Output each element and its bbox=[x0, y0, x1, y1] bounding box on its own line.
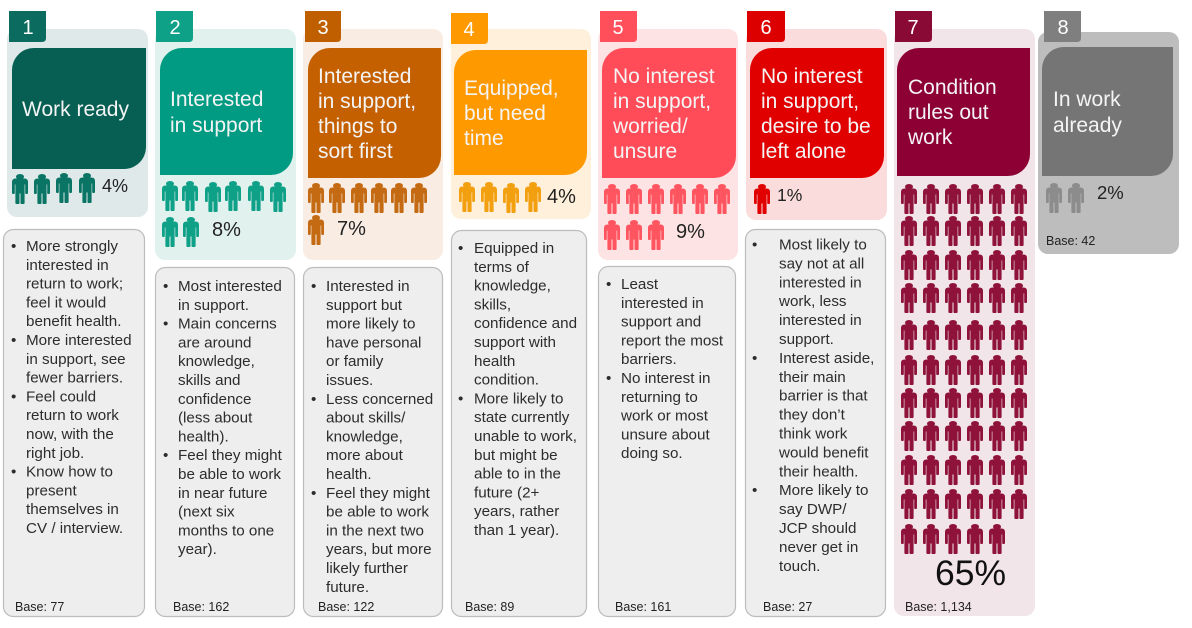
number tab 6: 6 bbox=[760, 17, 772, 39]
heading: no interest in support, worried/unsure: No interest bbox=[613, 65, 715, 88]
number tab 3: 3 bbox=[317, 17, 329, 39]
text block: segment 6: work, less bbox=[778, 293, 847, 310]
base 89: Base: 89 bbox=[465, 600, 514, 614]
heading: interested in support: in support bbox=[170, 114, 262, 137]
panel 1: work ready bbox=[7, 11, 148, 217]
text block: segment 3: • bbox=[311, 391, 316, 408]
text block: segment 1: CV / interview. bbox=[26, 520, 123, 537]
text block: segment 3: health. bbox=[326, 466, 372, 483]
text block: segment 4: able to in the bbox=[474, 466, 561, 483]
text block: segment 1: fewer barriers. bbox=[26, 370, 123, 387]
heading: no interest in support, worried/unsure: worried/ bbox=[612, 115, 688, 138]
text block: segment 4: More likely to bbox=[474, 390, 563, 407]
heading: interested in support, things to sort first: in support, bbox=[318, 90, 416, 113]
text block: segment 5: barriers. bbox=[621, 351, 677, 368]
text block: segment 4: future (2+ bbox=[474, 484, 540, 501]
text block: segment 2: skills and bbox=[178, 372, 240, 389]
text block: segment 6: touch. bbox=[779, 558, 820, 575]
number tab 4 bbox=[451, 13, 488, 44]
text block: segment 5: unsure about bbox=[621, 426, 710, 443]
text block: segment 4: state currently bbox=[474, 409, 570, 426]
text block: segment 3: • bbox=[311, 485, 316, 502]
text block: segment 4: unable to work, bbox=[474, 428, 577, 445]
text block: segment 3: years, but more bbox=[326, 541, 432, 558]
heading: no interest in support, desire to be left alone: left alone bbox=[761, 140, 846, 163]
text block: segment 2: are around bbox=[178, 334, 251, 351]
heading: no interest in support, desire to be left alone: No interest bbox=[761, 65, 863, 88]
heading: interested in support, things to sort first: sort first bbox=[318, 140, 393, 163]
text block: segment 1: interested in bbox=[26, 257, 109, 274]
heading: work ready: Work ready bbox=[22, 98, 129, 121]
heading: condition rules out work: work bbox=[907, 126, 953, 149]
percentage 8%: 8% bbox=[212, 219, 241, 241]
text block: segment 2: in near future bbox=[178, 485, 268, 502]
heading: interested in support, things to sort first bbox=[308, 48, 441, 178]
text block: segment 6: JCP should bbox=[779, 520, 856, 537]
panel 6: no interest in support, desire to be left alone bbox=[746, 11, 887, 220]
text block: segment 5: returning to bbox=[621, 389, 698, 406]
icons: 2 people bbox=[1046, 183, 1084, 213]
text block: segment 2: knowledge, bbox=[178, 353, 255, 370]
icons: 4 people bbox=[12, 173, 95, 204]
panel 5: no interest in support, worried/unsure bbox=[598, 11, 738, 260]
text block: segment 2: health). bbox=[178, 428, 229, 445]
icons: 4 people bbox=[459, 182, 541, 213]
number tab 6 bbox=[747, 11, 785, 42]
text block: segment 1: return to work bbox=[26, 407, 119, 424]
text block: segment 6 bbox=[746, 230, 886, 616]
icons: 1 person bbox=[754, 184, 770, 214]
heading: no interest in support, worried/unsure bbox=[602, 48, 736, 178]
text block: segment 5: • bbox=[606, 370, 611, 387]
heading: in work already: already bbox=[1053, 114, 1122, 137]
text block: segment 6: their health. bbox=[779, 463, 858, 480]
text block: segment 6: Interest aside, bbox=[779, 350, 874, 367]
text block: segment 4: than 1 year). bbox=[474, 522, 559, 539]
text block: segment 3: more about bbox=[326, 447, 404, 464]
heading: equipped, but need time: but need bbox=[464, 102, 546, 125]
text block: segment 5: Least bbox=[621, 276, 659, 293]
text block: segment 6: never get in bbox=[779, 539, 858, 556]
number tab 5: 5 bbox=[612, 17, 624, 39]
text block: segment 3: future. bbox=[326, 579, 369, 596]
heading: no interest in support, worried/unsure: unsure bbox=[613, 140, 677, 163]
text block: segment 2: Most interested bbox=[178, 278, 282, 295]
text block: segment 6: say not at all bbox=[779, 255, 864, 272]
number tab 2: 2 bbox=[169, 17, 181, 39]
heading: equipped, but need time: Equipped, bbox=[464, 77, 559, 100]
heading: no interest in support, worried/unsure: in support, bbox=[613, 90, 711, 113]
text block: segment 3: be able to work bbox=[326, 504, 429, 521]
number tab 1 bbox=[9, 11, 46, 42]
text block: segment 4: skills, bbox=[474, 296, 511, 313]
heading: condition rules out work: rules out bbox=[908, 101, 989, 124]
text block: segment 6: • bbox=[752, 482, 757, 499]
number tab 2 bbox=[156, 11, 193, 42]
text block: segment 2: Main concerns bbox=[178, 316, 277, 333]
text block: segment 2: be able to work bbox=[178, 466, 281, 483]
percentage 65%: 65% bbox=[935, 553, 1006, 593]
text block: segment 6: think work bbox=[779, 426, 848, 442]
heading: interested in support bbox=[160, 48, 293, 175]
base 77: Base: 77 bbox=[15, 600, 64, 614]
text block: segment 4: • bbox=[458, 240, 463, 257]
text block: segment 2: confidence bbox=[178, 391, 251, 408]
text block: segment 5: • bbox=[606, 276, 611, 293]
text block: segment 3: more likely to bbox=[326, 316, 415, 333]
number tab 1: 1 bbox=[22, 17, 34, 39]
text block: segment 3: have personal bbox=[326, 334, 421, 351]
percentage 1%: 1% bbox=[777, 185, 802, 205]
text block: segment 5: doing so. bbox=[621, 445, 683, 462]
text block: segment 6: interested in bbox=[779, 312, 862, 329]
heading: condition rules out work: Condition bbox=[908, 76, 997, 99]
panel 8: in work already bbox=[1038, 11, 1179, 254]
text block: segment 1: More interested bbox=[26, 332, 132, 349]
text block: segment 4: health bbox=[474, 353, 515, 370]
text block: segment 3: or family bbox=[326, 353, 384, 370]
text block: segment 2: • bbox=[163, 316, 168, 333]
number tab 7 bbox=[895, 11, 932, 42]
text block: segment 1: in support, see bbox=[26, 351, 126, 368]
text block: segment 3: in the next two bbox=[326, 522, 424, 539]
text block: segment 5: No interest in bbox=[621, 370, 710, 387]
text block: segment 4: years, rather bbox=[474, 503, 559, 520]
base 1,134: Base: 1,134 bbox=[905, 600, 972, 614]
panel 4: equipped, but need time bbox=[451, 13, 591, 219]
heading: condition rules out work bbox=[897, 48, 1030, 176]
text block: segment 6: Most likely to bbox=[779, 236, 867, 254]
text block: segment 1: themselves in bbox=[26, 501, 119, 518]
text block: segment 2: year). bbox=[178, 541, 217, 558]
heading: interested in support: Interested bbox=[170, 88, 263, 111]
text block: segment 1: • bbox=[11, 332, 16, 349]
heading: work ready bbox=[12, 48, 146, 169]
heading: no interest in support, desire to be left alone: in support, bbox=[761, 90, 859, 113]
text block: segment 6: would benefit bbox=[778, 444, 869, 461]
text block: segment 2 bbox=[156, 268, 294, 616]
text block: segment 4: condition. bbox=[474, 372, 539, 389]
base 162: Base: 162 bbox=[173, 600, 229, 614]
number tab 8: 8 bbox=[1057, 17, 1069, 39]
icons: 8 people bbox=[162, 181, 286, 247]
base 42: Base: 42 bbox=[1046, 234, 1095, 248]
text block: segment 2: Feel they might bbox=[178, 447, 283, 464]
number tab 4: 4 bbox=[463, 19, 475, 41]
text block: segment 5: report the most bbox=[621, 332, 724, 349]
number tab 5 bbox=[600, 11, 637, 42]
text block: segment 4: confidence and bbox=[474, 315, 577, 332]
text block: segment 1: feel it would bbox=[26, 294, 106, 311]
icons: 9 people bbox=[604, 184, 730, 250]
heading: interested in support, things to sort first: things to bbox=[318, 115, 397, 138]
percentage 2%: 2% bbox=[1097, 182, 1124, 203]
text block: segment 3 bbox=[304, 268, 442, 616]
panel 7: condition rules out work bbox=[894, 11, 1035, 616]
text block: segment 6: they don’t bbox=[779, 407, 846, 424]
text block: segment 2: (less about bbox=[178, 410, 253, 427]
text block: segment 6: support. bbox=[779, 331, 834, 348]
text block: segment 5: work or most bbox=[620, 408, 709, 425]
heading: equipped, but need time bbox=[454, 50, 587, 175]
text block: segment 1: benefit health. bbox=[26, 313, 121, 330]
text block: segment 6: More likely to bbox=[779, 482, 868, 499]
text block: segment 3: issues. bbox=[326, 372, 373, 389]
text block: segment 1: • bbox=[11, 464, 16, 481]
text block: segment 5: interested in bbox=[621, 295, 704, 312]
text block: segment 6: barrier is that bbox=[779, 388, 868, 405]
heading: interested in support, things to sort first: Interested bbox=[318, 65, 411, 88]
text block: segment 1: now, with the bbox=[26, 426, 114, 443]
text block: segment 4: • bbox=[458, 390, 463, 407]
text block: segment 2: months to one bbox=[178, 522, 274, 539]
text block: segment 4: support with bbox=[474, 334, 556, 351]
percentage 7%: 7% bbox=[337, 218, 366, 240]
icons: 7 people bbox=[308, 183, 427, 245]
text block: segment 1: present bbox=[26, 482, 77, 499]
text block: segment 4 bbox=[452, 230, 586, 616]
text block: segment 6: say DWP/ bbox=[779, 501, 847, 518]
text block: segment 1: • bbox=[11, 238, 16, 255]
percentage 4%: 4% bbox=[102, 176, 128, 196]
text block: segment 2: • bbox=[163, 278, 168, 295]
text block: segment 1: Feel could bbox=[26, 388, 96, 405]
text block: segment 3: Less concerned bbox=[326, 391, 433, 408]
text block: segment 6: • bbox=[752, 236, 757, 254]
number tab 8 bbox=[1044, 11, 1081, 42]
text block: segment 6: their main bbox=[779, 369, 846, 386]
text block: segment 3: knowledge, bbox=[326, 428, 403, 445]
heading: equipped, but need time: time bbox=[464, 127, 504, 150]
heading: in work already: In work bbox=[1053, 88, 1121, 111]
panel 3: interested in support, things to sort first bbox=[303, 11, 443, 260]
heading: no interest in support, desire to be left alone bbox=[750, 48, 884, 178]
percentage 9%: 9% bbox=[676, 221, 705, 243]
base 27: Base: 27 bbox=[763, 600, 812, 614]
text block: segment 1: Know how to bbox=[26, 464, 113, 481]
text block: segment 1: return to work; bbox=[26, 276, 123, 293]
text block: segment 1: • bbox=[11, 388, 16, 405]
text block: segment 3: • bbox=[311, 278, 316, 295]
text block: segment 2: • bbox=[163, 447, 168, 464]
text block: segment 4: knowledge, bbox=[474, 278, 551, 295]
text block: segment 5 bbox=[598, 266, 736, 616]
text block: segment 1: More strongly bbox=[26, 238, 118, 255]
number tab 3 bbox=[305, 11, 341, 42]
percentage 4%: 4% bbox=[547, 186, 576, 208]
text block: segment 3: Interested in bbox=[326, 278, 410, 295]
text block: segment 5: support and bbox=[621, 314, 701, 331]
text block: segment 4: Equipped in bbox=[474, 240, 554, 257]
icons: 65 people bbox=[901, 184, 1027, 554]
text block: segment 2: (next six bbox=[178, 504, 235, 521]
text block: segment 1 bbox=[4, 230, 144, 616]
number tab 7: 7 bbox=[907, 17, 919, 39]
base 122: Base: 122 bbox=[318, 600, 374, 614]
text block: segment 4: but might be bbox=[474, 447, 558, 464]
text block: segment 3: Feel they might bbox=[326, 485, 431, 502]
base 161: Base: 161 bbox=[615, 600, 671, 614]
heading: in work already bbox=[1042, 47, 1173, 176]
text block: segment 4: terms of bbox=[474, 259, 530, 276]
text block: segment 3: likely further bbox=[326, 560, 408, 577]
heading: no interest in support, desire to be left alone: desire to be bbox=[761, 115, 871, 138]
text block: segment 3: about skills/ bbox=[326, 410, 406, 427]
text block: segment 6: interested in bbox=[779, 274, 862, 291]
text block: segment 3: support but bbox=[326, 297, 403, 314]
text block: segment 2: in support. bbox=[178, 297, 249, 314]
text block: segment 6: • bbox=[752, 350, 757, 367]
text block: segment 1: right job. bbox=[26, 445, 84, 462]
panel 2: interested in support bbox=[155, 11, 296, 260]
